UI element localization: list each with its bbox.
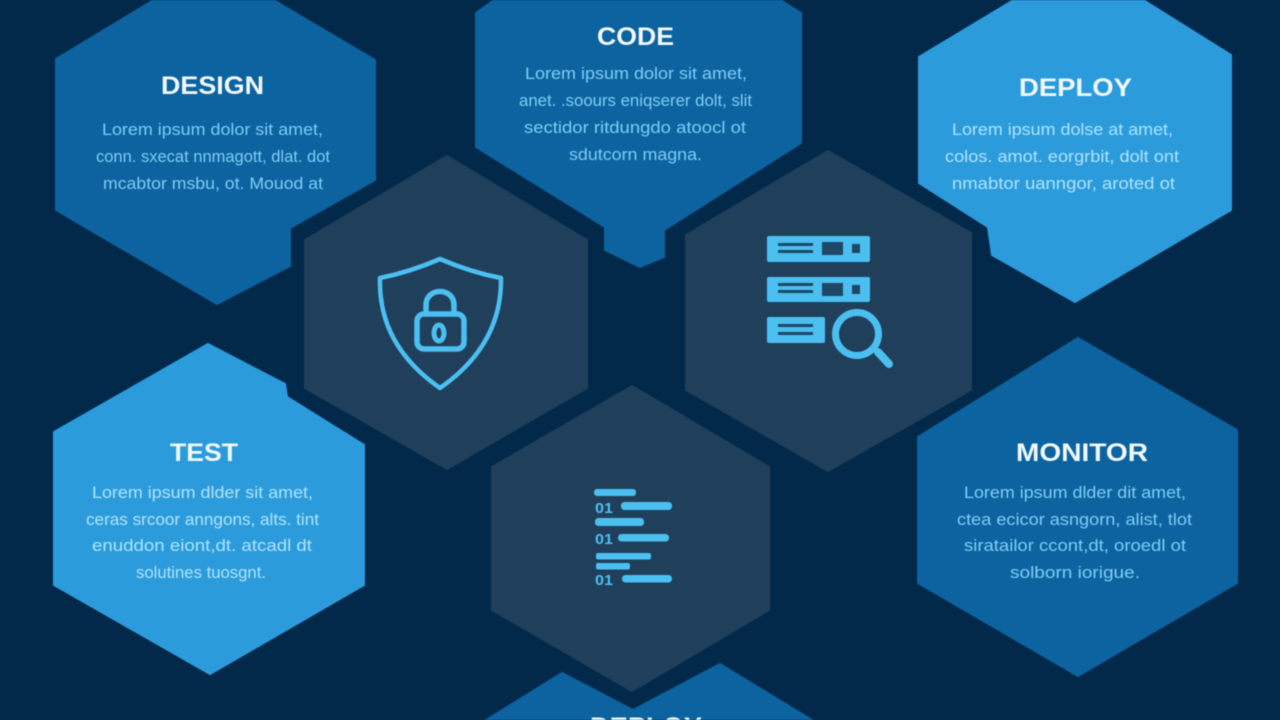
text: code description: Lorem ipsum dolor sit amet,	[525, 65, 747, 83]
text: test description: enuddon eiont,dt. atcadl dt	[92, 537, 312, 555]
text: deploy description: colos. amot. eorgrbit, dolt ont	[945, 148, 1179, 166]
heading: code: CODE	[597, 23, 674, 51]
panel: security hexagon	[305, 156, 587, 469]
text: test description	[86, 484, 319, 582]
panel: monitor	[918, 338, 1237, 676]
heading: deploy: DEPLOY	[1019, 74, 1132, 102]
text: code description: sdutcorn magna.	[569, 146, 702, 164]
text: monitor description: Lorem ipsum dlder dit amet,	[964, 484, 1186, 502]
text: code description: sectidor ritdungdo atoocl ot	[524, 119, 746, 137]
heading: design: DESIGN	[161, 72, 264, 100]
text: deploy description	[945, 121, 1179, 193]
panel: deploy bottom (cropped)	[483, 664, 815, 720]
text: code description	[519, 65, 752, 164]
icon: shield with padlock	[380, 259, 501, 388]
panel: design	[56, 0, 375, 304]
icon: server rows with magnifier	[767, 236, 889, 364]
heading: monitor: MONITOR	[1016, 439, 1148, 467]
panel: code list hexagon	[492, 386, 769, 691]
icon: binary code list: 01	[595, 572, 613, 589]
text: deploy description: Lorem ipsum dolse at amet,	[952, 121, 1173, 139]
text: monitor description	[957, 484, 1192, 582]
panel: code	[476, 0, 801, 267]
text: design description: conn. sxecat nnmagott, dlat. dot	[96, 148, 330, 166]
text: design description	[96, 121, 330, 193]
panel: test	[54, 344, 364, 674]
text: monitor description: ctea ecicor asngorn, alist, tlot	[957, 511, 1192, 529]
text: monitor description: siratailor ccont,dt, oroedl ot	[964, 537, 1186, 555]
icon: binary code list: 01	[595, 531, 613, 548]
icon: binary code list	[594, 489, 672, 589]
panel: deploy top right	[919, 0, 1231, 302]
heading: test: TEST	[170, 439, 238, 467]
text: code description: anet. .soours eniqserer dolt, slit	[519, 92, 752, 110]
text: design description: mcabtor msbu, ot. Mouod at	[103, 175, 323, 193]
icon: binary code list: 01	[595, 500, 613, 517]
panel: server search hexagon	[686, 151, 971, 471]
text: test description: solutines tuosgnt.	[136, 564, 266, 582]
text: test description: ceras srcoor anngons, alts. tint	[86, 511, 319, 529]
text: design description: Lorem ipsum dolor sit amet,	[102, 121, 323, 139]
text: monitor description: solborn iorigue.	[1010, 564, 1140, 582]
text: deploy description: nmabtor uanngor, aroted ot	[952, 175, 1175, 193]
text: test description: Lorem ipsum dlder sit amet,	[92, 484, 313, 502]
